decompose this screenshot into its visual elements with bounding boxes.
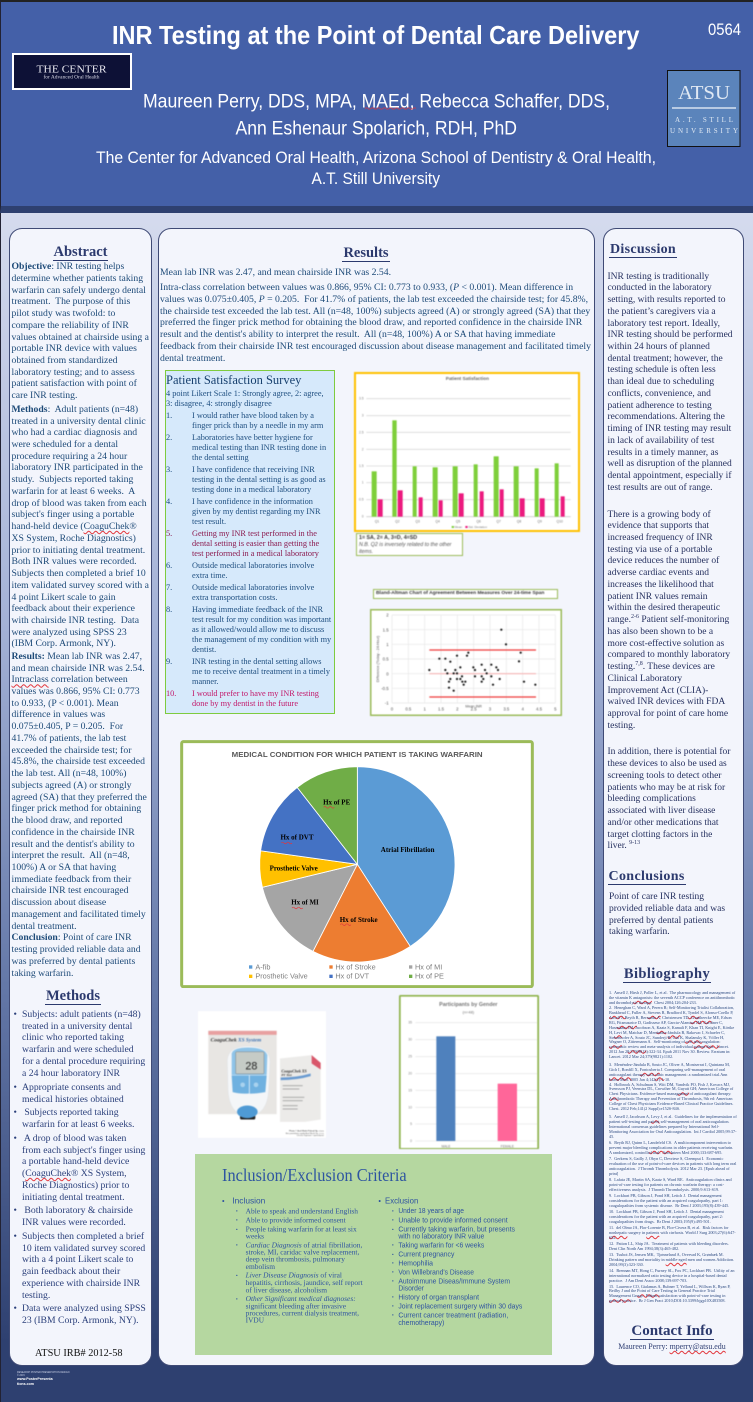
bland-altman title: Bland-Altman Chart of Agreement Between Measures Over 24-time Span [376,591,544,596]
survey items: 6. [166,561,172,570]
chart: bland-altman scatter: 1 [386,642,389,647]
chart: bland-altman scatter: 0 [390,707,393,712]
chart: bland-altman scatter: -0.5 [381,686,389,691]
bibliography list: 11. del Olmo JA, Flor-Lorente B, Flor-Civera B, et al. Risk factors for nonhepatic surgery in patients with cirrhosis. World J Surg 2003;27(6):647- 652. [609,1225,736,1240]
bibliography list: 9. Lockhart PB, Gibson J, Pond SH, Leitch J. Dental management considerations for the patient with an acquired coagulopathy, part 1: coagulopathies from systemic disease. Br Dent J 2003;195(8):439-445. [609,1193,729,1208]
inclusion list: of liver disease, alcoholism [246,1285,327,1294]
survey items: 7. [166,583,172,592]
bar chart: patient satisfaction [353,371,581,533]
bar chart: participants by gender: 0 [410,1139,412,1143]
contact line: Maureen Perry: mperry@atsu.edu [618,1342,726,1351]
bibliography list: 12. Patton LL, Ship JA. Treatment of patients with bleeding disorders. Dent Clin North Am 1994;38(3):465-482. [609,1241,729,1251]
bar chart: patient satisfaction: Std. Deviation [469,525,488,529]
inclusion list: Liver Disease Diagnosis of viral [245,1271,342,1280]
inclusion list: • [236,1218,238,1223]
survey items: 8. [166,605,172,614]
heading: methods: Methods [46,988,100,1004]
survey items: I would prefer to have my INR testing done by my dentist in the future [192,689,319,708]
inclusion list: embolism [246,1262,275,1271]
logo: The Center [13,54,131,89]
bar chart: patient satisfaction: Q8 [517,519,522,523]
survey items: Outside medical laboratories involve extra time. [192,561,314,580]
chart: bland-altman scatter: 4.5 [536,707,542,712]
affiliation: The Center for Advanced Oral Health, Arizona School of Dentistry & Oral Health, [96,148,656,167]
pie chart: medical condition [180,740,534,988]
bar chart: patient satisfaction: Q1 [375,519,380,523]
photo: CoaguChek XS device and test box: Photo © Axel Markt Poland Sp. z o.o. [289,1130,324,1133]
photo: CoaguChek XS device and test box: Bez powielania zgody Axel Markt Sp. z o.o. [286,1132,324,1135]
survey items: I would rather have blood taken by a finger prick than by a needle in my arm [192,411,323,430]
inclusion list: • [222,1196,225,1205]
chart note: 1= SA, 2= A, 3=D, 4=SD N.B. Q2 is inversely related to the other items. [359,535,451,555]
exclusion list: Current pregnancy [398,1250,455,1259]
pie labels: Prosthetic Valve [270,865,318,873]
exclusion list: • [392,1218,394,1223]
survey items: 9. [166,657,172,666]
affiliation [96,148,656,188]
logo: The Center: THE CENTER [36,64,106,76]
panel: right column [603,228,744,1366]
chart: bland-altman scatter: 0 [386,672,389,677]
survey items: 2. [166,433,172,442]
survey scale: 4 point Likert Scale 1: Strongly agree, 2: agree, 3: disagree, 4: strongly disagree [166,389,324,408]
pie labels: Atrial Fibrillation [381,846,435,854]
pie legend: A-fib [255,962,270,971]
authors: Ann Eshenaur Spolarich, RDH, PhD [236,118,517,140]
bar chart: patient satisfaction: 3.5 [359,396,364,400]
exclusion list: History of organ transplant [398,1292,479,1301]
inclusion list: significant bleeding after invasive [246,1302,347,1311]
logo: ATSU [668,70,740,146]
photo: CoaguChek XS device and test box: PT Test [281,1073,292,1077]
bibliography list: 15. Laurence CO, Gialamas A, Bubner T, Yelland L, Willson K, Ryan P, Beilby J and the Point of Care Testing in General Practice Trial Management Group. Patient satisfaction with point-of-care testing in general practice. Br J Gen Pract 2010;DOI:10.3399/bjgp10X483508. [609,1284,730,1303]
abstract methods: Methods: Adult patients (n=48) treated in a university dental clinic who had a cardiac diagnosis and were scheduled for a dental procedure requiring a 24 hour laboratory INR participated in the study. Subjects reported taking warfarin for at least 6 weeks. A drop of blood was taken from each subject's finger using a portable hand-held device (CoaguChek® XS System, Roche Diagnostics) prior to initiating dental treatment. Both INR values were recorded. Subjects then completed a brief 10 item validated survey scored with a 4 point Likert scale to gain feedback about their experience with chairside INR testing. Data were analyzed using SPSS 23 (IBM Corp. Armonk, NY). [12,404,149,649]
photo: CoaguChek XS device and test box [198,1012,326,1138]
inclusion list: People taking warfarin for at least six [246,1225,357,1234]
bar chart: participants by gender: 30 [408,1037,412,1041]
affiliation: A.T. Still University [312,169,440,188]
inclusion list [222,1196,364,1324]
methods bullets: A drop of blood was taken from each subject's finger using a portable hand-held device (CoaguChek® XS System, Roche Diagnostics) prior to initiating dental treatment. [22,1133,145,1203]
abstract conclusion: Conclusion: Point of care INR testing provided reliable data and was preferred by dental patients taking warfarin. [12,932,141,979]
pie labels: Hx of PE [323,799,351,807]
heading: abstract: Abstract [54,244,107,260]
abstract objective: Objective: INR testing helps determine whether patients taking warfarin can safely undergo dental treatment. The purpose of this pilot study was twofold: to compare the reliability of INR values obtained at chairside using a portable INR device with values obtained from standardized laboratory testing; and to assess patient satisfaction with point of care INR testing. [12,261,149,401]
pie legend: Hx of DVT [335,972,370,981]
pie legend: Hx of PE [415,972,444,981]
heading: bibliography: Bibliography [624,966,710,982]
exclusion list: Currently taking warfarin, but presents [398,1225,515,1234]
exclusion list: chemotherapy) [398,1318,444,1327]
logo: ATSU: UNIVERSITY [670,127,738,135]
inclusion list: Able to provide informed consent [246,1215,347,1224]
pie slices [260,767,455,962]
panel: left column [9,228,152,1366]
pie legend [249,962,444,981]
survey title: Patient Satisfaction Survey [166,373,301,387]
chart: bland-altman scatter: 0.5 [405,707,412,712]
bibliography list [609,990,737,1303]
heading: discussion: Discussion [610,242,676,257]
inclusion list: deep vein thrombosis, pulmonary [246,1255,345,1264]
survey items: 4. [166,497,172,506]
methods bullets: Subjects: adult patients (n=48) treated in a university dental clinic who reported taking warfarin and were scheduled for a dental procedure requiring a 24 hour laboratory INR [22,1009,145,1079]
discussion paragraph 1: INR testing is traditionally conducted in the laboratory setting, with results reported to the patient’s caregivers via a laboratory test report. Ideally, INR testing should be performed within 24 hours of planned dental treatment; however, the testing schedule is often less than ideal due to scheduling conflicts, convenience, and patient adherence to testing recommendations. Altering the timing of INR testing may result in lack of availability of test results in a timely manner, as well as disruption of the planned dental appointment, especially if test results are out of range. [608,272,733,493]
photo: CoaguChek XS device and test box: CoaguChek XS System [211,1038,261,1044]
exclusion list: Taking warfarin for <6 weeks [398,1240,485,1249]
bar chart: participants by gender: 10 [408,1105,412,1109]
title: INR Testing at the Point of Dental Care Delivery [112,20,640,50]
bar chart: patient satisfaction: 2 [362,447,364,451]
results text: Mean lab INR was 2.47, and mean chairside INR was 2.54. [160,267,391,278]
pie legend: Prosthetic Valve [255,972,308,981]
inclusion list: • [236,1273,238,1278]
pie labels: Hx of DVT [281,834,314,842]
inclusion list: • [236,1227,238,1232]
bland-altman title [373,589,558,599]
survey items: INR testing in the dental setting allows me to receive dental treatment in a timely manner. [192,657,330,686]
survey items: 5. [166,529,172,538]
bibliography list: 7. Gerkens S, Gailly J, Obyn C, Devriese S, Cleemput I. Economic evaluation of the use of point-of-care devices in patients with long term oral anticoagulation. J Thromb Thrombolysis. 2012 Mar 23. [Epub ahead of print] [609,1156,736,1176]
survey items: 3. [166,465,172,474]
chart: bland-altman scatter: 2.5 [470,707,477,712]
photo: CoaguChek XS device and test box: 28 [245,1060,257,1072]
panel: results [158,228,595,1366]
bibliography list: 10. Lockhart PB, Gibson J, Pond SH, Leitch J. Dental management considerations for the patient with an acquired coagulopathy, part 2: coagulopathies from drugs. Br Dent J 2003;195(9):495-501. [609,1209,724,1224]
abstract results: Results: Mean lab INR was 2.47, and mean chairside INR was 2.54. Intraclass correlation between values was 0.866, 95% CI: 0.773 to 0.933, (P < 0.001). Mean difference in values was 0.075±0.405, P = 0.205. For 41.7% of patients, the lab test exceeded the chairside test; for 45.8%, the chairside test exceeded the lab test. All (n=48, 100%) subjects agreed (A) or strongly agreed (SA) that they preferred the finger prick method for obtaining the blood draw, and reported confidence in the chairside INR result and the dentist's ability to interpret the result. All (n=48, 100%) A or SA that having immediate feedback from their chairside INR test encouraged discussion about disease management and facilitated timely dental treatment. [12,651,147,932]
exclusion list: Disorder [398,1283,425,1292]
conclusions text: Point of care INR testing provided reliable data and was preferred by dental patients taking warfarin. [609,892,725,937]
bar chart: patient satisfaction: Q4 [436,519,440,523]
bar chart: participants by gender: 5 [410,1122,412,1126]
bar chart: patient satisfaction: 1 [362,480,364,484]
pie legend: Hx of Stroke [335,962,376,971]
chart: bland-altman scatter: 5 [554,707,557,712]
methods bullets: Data were analyzed using SPSS 23 (IBM Corp. Armonk, NY). [22,1303,146,1326]
bar chart: participants by gender: FEMALE [500,1144,514,1148]
discussion paragraph 2: There is a growing body of evidence that supports that increased frequency of INR testing via use of a portable device reduces the number of adverse cardiac events and increases the likelihood that patient INR values remain within the desired therapeutic range.2-6 Patient self-monitoring has also been shown to be a more cost-effective solution as compared to monthly laboratory testing.7,8. These devices are Clinical Laboratory Improvement Act (CLIA)- waived INR devices with FDA approval for point of care home testing. [608,510,730,731]
inclusion list: Able to speak and understand English [246,1206,358,1215]
inclusion list: Other Significant medical diagnoses: [246,1294,356,1303]
methods bullets: Subjects then completed a brief 10 item validated survey scored with a 4 point Likert scale to gain feedback about their experience with chairside INR testing. [22,1231,145,1301]
exclusion list: Under 18 years of age [398,1206,464,1215]
bibliography list: 3. Menéndez-Jándula B, Souto JC, Oliver A, Montserrat I, Quintana M, Gich I, Bonfill X, Fontcuberta J. Comparing self-management of oral anticoagulant therapy with clinic management: a randomized trial.Ann Intern Med. 2005 Jan 4;142(1):1-10. [609,1062,730,1082]
footer: poster template credit: RESEARCH POSTER PRESENTATION DESIGN © 2015 www.PosterPresenta tions.com [17,1371,70,1386]
survey items: Having immediate feedback of the INR test result for my condition was important as it allowed/would allow me to discuss the management of my condition with my dentist. [192,605,331,654]
survey items: 10. [166,689,176,698]
exclusion list: • [392,1227,394,1232]
bar chart: patient satisfaction: Q9 [538,519,542,523]
chart: bland-altman scatter: 1.5 [438,707,444,712]
exclusion list: • [392,1295,394,1300]
authors [143,92,610,140]
exclusion list: • [392,1313,394,1318]
exclusion list: Unable to provide informed consent [398,1215,508,1224]
exclusion list: • [378,1196,381,1205]
bar chart: patient satisfaction: Patient Satisfaction [446,376,489,381]
chart: bland-altman scatter: 1.5 [382,628,389,633]
IRB number: ATSU IRB# 2012-58 [35,1348,123,1359]
bibliography list: 14. Brennan MT, Hong C, Furney SL, Fox PC, Lockhart PB. Utility of an international normalized ratio testing device in a hospital-based dental practice. J Am Dent Assoc 2008;139:697-703. [609,1268,734,1283]
exclusion list: • [392,1270,394,1275]
bar chart: patient satisfaction: Q10 [557,519,563,523]
bibliography list: 4. Holbrook A, Schulman S, Witt DM, Vandvik PO, Fish J, Kovacs MJ, Svensson PJ, Veenstra DL, Crowther M, Guyatt GH; American College of Chest Physicians. Evidence-based management of anticoagulant therapy: Antithrombotic Therapy and Prevention of Thrombosis, 9th ed: American College of Chest Physicians Evidence-Based Clinical Practice Guidelines. Chest. 2012 Feb;141(2 Suppl):e152S-84S. [609,1082,733,1111]
bar chart: patient satisfaction: 0.5 [359,497,364,501]
bar chart: patient satisfaction: 2.5 [359,430,364,434]
exclusion list: • [392,1279,394,1284]
bibliography list: 1. Ansell J, Hirsh J, Poller L, et al. The pharmacology and management of the vitamin K antagonists: the seventh ACCP conference on antithrombotic and thrombolytic therapy. Chest 2004;126:204-233. [609,990,735,1005]
inclusion list: weeks [246,1232,264,1241]
methods bullets: Subjects reported taking warfarin for at least 6 weeks. [22,1107,134,1130]
poster number: 0564 [708,21,741,39]
panel: inclusion / exclusion criteria [195,1154,552,1355]
bar chart: patient satisfaction: 3 [362,413,364,417]
exclusion list: • [392,1252,394,1257]
exclusion list: Autoimmune Diseas/Immune System [398,1276,510,1285]
exclusion list [378,1196,523,1327]
logo: ATSU: A.T. STILL [675,116,733,124]
bar chart: patient satisfaction: 0 [362,514,364,518]
pie legend: Hx of MI [415,962,442,971]
heading: contact info: Contact Info [631,1323,713,1339]
exclusion list: Current cancer treatment (radiation, [398,1310,508,1319]
photo: CoaguChek XS device and test box: CoaguChek XS [281,1068,308,1074]
panel: patient satisfaction survey [165,370,335,714]
bar chart: participants by gender: 15 [408,1088,412,1092]
bar chart: participants by gender: 35 [408,1020,412,1024]
criteria title: Inclusion/Exclusion Criteria [222,1165,407,1185]
bar chart: patient satisfaction: Mean [455,525,463,529]
survey items: Outside medical laboratories involve extra transportation costs. [192,583,314,602]
results text: Intra-class correlation between values was 0.866, 95% CI: 0.773 to 0.933, (P < 0.001). Mean difference in values was 0.075±0.405, P = 0.205. For 41.7% of patients, the lab test exceeded the chairside test; for 45.8%, the chairside test exceeded the lab test. All (n=48, 100%) subjects agreed (A) or strongly agreed (SA) that they preferred the finger prick method for obtaining the blood draw, and reported confidence in the chairside INR result and the dentist's ability to interpret the result. All (n=48, 100%) A or SA that having immediate feedback from their chairside INR test encouraged discussion about disease management and facilitated timely dental treatment. [160,282,591,364]
logo: ATSU: ATSU [678,82,731,104]
exclusion list: with no laboratory INR value [397,1232,484,1241]
survey items: 1. [166,411,172,420]
bibliography list: 13. Tsuboi JS, Jensen MK, Tjønneland A, Overvad K, Grønbæk M. Drinking pattern and mortality in middle-aged men and women.Addiction. 2004;99(3):323-330. [609,1252,734,1267]
bar chart: patient satisfaction: Q5 [456,519,461,523]
survey items: Laboratories have better hygiene for medical testing than INR testing done in the dental setting [192,433,326,462]
exclusion list: • [392,1261,394,1266]
chart: bland-altman scatter: 2 [386,613,389,618]
discussion paragraph 3: In addition, there is potential for these devices to also be used as screening tools to detect other patients who may be at risk for bleeding complications associated with liver disease and/or other medications that target clotting factors in the liver. 9-13 [608,747,730,851]
photo: CoaguChek XS device and test box: Chcesz kupować i sprzedawać [297,1135,324,1137]
pie labels: Hx of Stroke [340,916,378,924]
methods bullets [14,1009,146,1326]
pie title: MEDICAL CONDITION FOR WHICH PATIENT IS TAKING WARFARIN [232,750,483,759]
exclusion list: • [392,1243,394,1248]
chart: bland-altman scatter: 0.5 [382,657,389,662]
logo: The Center: for Advanced Oral Health [44,76,100,80]
bar chart: patient satisfaction: Q6 [477,519,481,523]
authors: Maureen Perry, DDS, MPA, MAEd, Rebecca Schaffer, DDS, [143,92,610,112]
inclusion list: • [236,1209,238,1214]
bibliography list: 8. Lafata JE, Martin SA, Kaatz S, Ward RE. Anticoagulation clinics and point-of-care testing for patients on chronic warfarin therapy: a cost- effectiveness analysis. J Thromb Thrombolysis. 2000;9:S13-S19. [609,1177,732,1192]
inclusion list: Cardiac Diagnosis of atrial fibrillation, [246,1240,362,1249]
survey items: Getting my INR test performed in the dental setting is easier than getting the test performed in a medical laboratory [192,529,319,558]
heading: results: Results [343,245,389,261]
survey items [166,411,332,708]
bibliography list: 6. Beyth RJ, Quinn L, Landefeld CS. A multicomponent intervention to prevent major bleeding complications in older patients receiving warfarin. A randomized, controlled trial. Ann Intern Med 2000;133:687-695. [609,1140,733,1155]
chart: bland-altman scatter: -1 [384,701,389,706]
survey items: I have confidence in the information given by my dentist regarding my INR test result. [192,497,321,526]
bibliography list: 2. Heneghan C, Ward A, Perera R; Self-Monitoring Trialist Collaboration, Bankhead C, Fuller A, Stevens R, Bradford K, Tyndel S, Alonso-Coello P, Ansell J, Beyth R, Bernardo A, Christensen TD, Cromheecke ME, Edson RG, Fitzmaurice D, Gadisseur AP, Garcia-Alamino JM, Gardiner C, Hasenkam JM, Jacobson A, Kaatz S, Kamali F, Khan TI, Knight E, Körtke H, Levi M, Matchar D, Menéndez-Jándula B, Rakovac I, Schaefer C, Siebenhofer A, Souto JC, Sunderji R, Gin K, Shalansky K, Völler H, Wagner O, Zittermann A. Self-monitoring of oral anticoagulation: systematic review and meta-analysis of individual patient data. Lancet. 2012 Jan 28;379(9813):322-34. Epub 2011 Nov 30. Review. Erratum in: Lancet. 2012 Mar 24;379(9821):1102. [609,1005,734,1059]
bar chart: participants by gender: Participants by Gender [439,1002,497,1008]
bar chart: participants by gender: (n=48) [462,1009,474,1014]
chart: bland-altman scatter: 1 [423,707,426,712]
bar chart: patient satisfaction: Q3 [416,519,420,523]
inclusion list: hepatitis, cirrhosis, jaundice, self report [246,1278,364,1287]
pie labels: Hx of MI [291,899,319,907]
survey items: I have confidence that receiving INR testing in the dental setting is as good as testing done in a medical laboratory [192,465,326,494]
exclusion list: • [392,1304,394,1309]
chart: bland-altman scatter: 3 [488,707,491,712]
inclusion list: IVDU [246,1315,264,1324]
methods bullets: Both laboratory & chairside INR values were recorded. [22,1205,133,1228]
inclusion list: • [236,1296,238,1301]
inclusion list: • [236,1243,238,1248]
bibliography list: 5. Ansell J, Jacobson A, Levy J, et al. Guidelines for the implementation of patient self-testing and patient self-management of oral anticoagulation. International consensus guidelines prepared by International Self- Monitoring Association for Oral Anticoagulation. Int J Cardiol 2005;99:37- 45. [609,1114,737,1139]
chart: bland-altman scatter: 3.5 [503,707,510,712]
bar chart: participants by gender: 20 [408,1071,412,1075]
chart: bland-altman scatter [369,608,563,717]
inclusion list: Inclusion [232,1197,265,1206]
heading: conclusions: Conclusions [608,869,685,884]
chart: bland-altman scatter: Mean INR [465,705,482,709]
inclusion list: stroke, MI, caridac valve replacement, [246,1248,359,1257]
chart: bland-altman scatter: 2 [456,707,459,712]
exclusion list: Hemophilia [398,1258,434,1267]
bar chart: participants by gender [398,994,540,1150]
bar chart: patient satisfaction: 1.5 [359,464,364,468]
header banner [0,0,753,213]
bar chart: patient satisfaction: Q2 [395,519,400,523]
bar chart: patient satisfaction: Q7 [497,519,501,523]
exclusion list: Von Willebrand's Disease [398,1267,474,1276]
bar chart: participants by gender: MALE [441,1144,451,1148]
chart: bland-altman scatter: Difference (Today - 24-Hour) [376,636,380,682]
inclusion list: procedures, current dialysis treatment, [246,1309,359,1318]
chart: bland-altman scatter: 4 [521,707,524,712]
exclusion list: Exclusion [385,1197,418,1206]
exclusion list: • [392,1208,394,1213]
bar chart: participants by gender: 25 [408,1054,412,1058]
exclusion list: Joint replacement surgery within 30 days [398,1301,523,1310]
pie labels [270,799,435,924]
methods bullets: Appropriate consents and medical histories obtained [22,1082,124,1105]
